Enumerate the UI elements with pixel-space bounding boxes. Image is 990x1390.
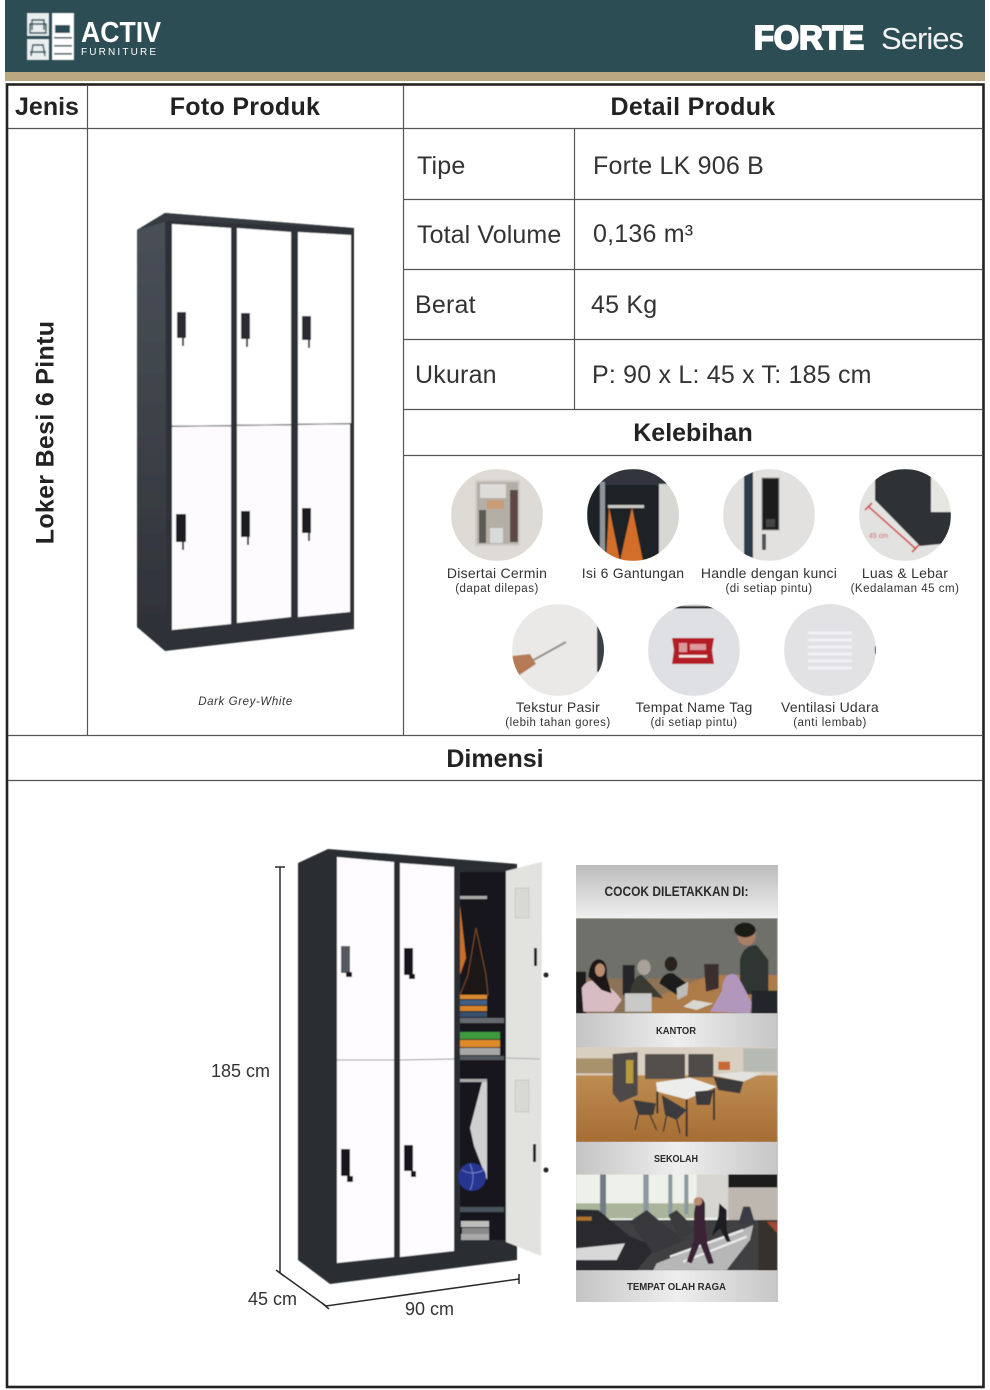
heading: Kelebihan: Kelebihan <box>633 419 753 447</box>
icon: hand scratching texture <box>512 604 605 696</box>
feature: key handle: (di setiap pintu) <box>725 583 813 595</box>
heading: Detail Produk: Detail Produk <box>610 93 776 121</box>
spec row: size: Ukuran <box>415 361 497 389</box>
door handles <box>341 946 416 1182</box>
icon: hanger with towels <box>587 469 681 562</box>
spec row: weight <box>415 291 657 319</box>
feature: sand texture <box>505 604 611 729</box>
feature: key handle <box>701 469 837 595</box>
label: gym: TEMPAT OLAH RAGA <box>627 1281 726 1293</box>
feature: sand texture: (lebih tahan gores) <box>505 717 611 729</box>
dimension label: width: 90 cm <box>405 1299 454 1319</box>
feature: mirror: (dapat dilepas) <box>455 583 539 595</box>
icon: locker corner with 45 cm measure: 45 cm <box>869 533 888 540</box>
feature: mirror: Disertai Cermin <box>447 565 547 581</box>
panel title: COCOK DILETAKKAN DI: <box>604 884 748 899</box>
icon: handle and key <box>723 469 815 561</box>
photo: office meeting <box>576 918 777 1013</box>
panel: suitable locations <box>576 865 778 1302</box>
series title: Series <box>881 21 964 56</box>
dimension locker photo <box>298 849 548 1284</box>
spec row: weight: 45 Kg <box>591 291 657 319</box>
open door <box>506 862 542 1256</box>
feature: key handle: Handle dengan kunci <box>701 565 837 581</box>
feature: air vent: Ventilasi Udara <box>781 699 879 715</box>
spec row: size: P: 90 x L: 45 x T: 185 cm <box>592 361 872 389</box>
spec row: type: Tipe <box>417 152 466 180</box>
icon: mirror <box>451 469 543 561</box>
feature: air vent <box>781 604 879 729</box>
feature: depth <box>851 469 959 595</box>
product photo: 6-door locker <box>137 213 354 651</box>
header band <box>5 0 985 81</box>
spec row: size <box>415 361 872 389</box>
feature: air vent: (anti lembab) <box>793 717 867 729</box>
feature: hangers: Isi 6 Gantungan <box>582 565 684 581</box>
dimension label: height: 185 cm <box>211 1061 270 1081</box>
heading: Jenis: Jenis <box>15 93 79 121</box>
spec row: type: Forte LK 906 B <box>593 152 764 180</box>
spec row: type <box>417 152 764 180</box>
series title: FORTE <box>754 19 864 56</box>
feature: name tag: (di setiap pintu) <box>650 717 738 729</box>
logo icon: furniture grid <box>27 13 74 60</box>
spec table <box>415 152 872 389</box>
dimension lines <box>275 867 519 1309</box>
feature: name tag <box>635 604 753 729</box>
heading: Foto Produk: Foto Produk <box>170 93 320 121</box>
label: school: SEKOLAH <box>654 1153 698 1165</box>
photo: gym <box>576 1174 777 1270</box>
brand logo: Activ Furniture <box>27 13 162 60</box>
spec row: weight: Berat <box>415 291 476 319</box>
dimension label: depth: 45 cm <box>248 1289 297 1309</box>
feature: depth: (Kedalaman 45 cm) <box>851 583 959 595</box>
open compartment <box>458 872 505 1240</box>
feature: mirror <box>447 469 547 595</box>
heading: Dimensi: Dimensi <box>446 745 544 773</box>
vertical label: locker type: Loker Besi 6 Pintu <box>32 321 60 544</box>
logo wordmark: ACTIV <box>81 17 162 49</box>
feature: hangers <box>582 469 684 581</box>
spec row: volume: Total Volume <box>417 221 561 249</box>
spec row: volume <box>417 220 693 249</box>
icon: vent slots <box>784 604 877 696</box>
logo subtitle: FURNITURE <box>81 47 156 58</box>
icon: red name tag <box>648 604 740 696</box>
feature: name tag: Tempat Name Tag <box>635 699 753 715</box>
photo caption: Dark Grey-White <box>198 696 293 708</box>
series title <box>754 19 964 56</box>
feature: sand texture: Tekstur Pasir <box>516 699 600 715</box>
feature: depth: Luas & Lebar <box>862 565 948 581</box>
photo: school library <box>576 1047 777 1142</box>
spec row: volume: 0,136 m³ <box>593 220 693 248</box>
label: office: KANTOR <box>656 1025 696 1037</box>
